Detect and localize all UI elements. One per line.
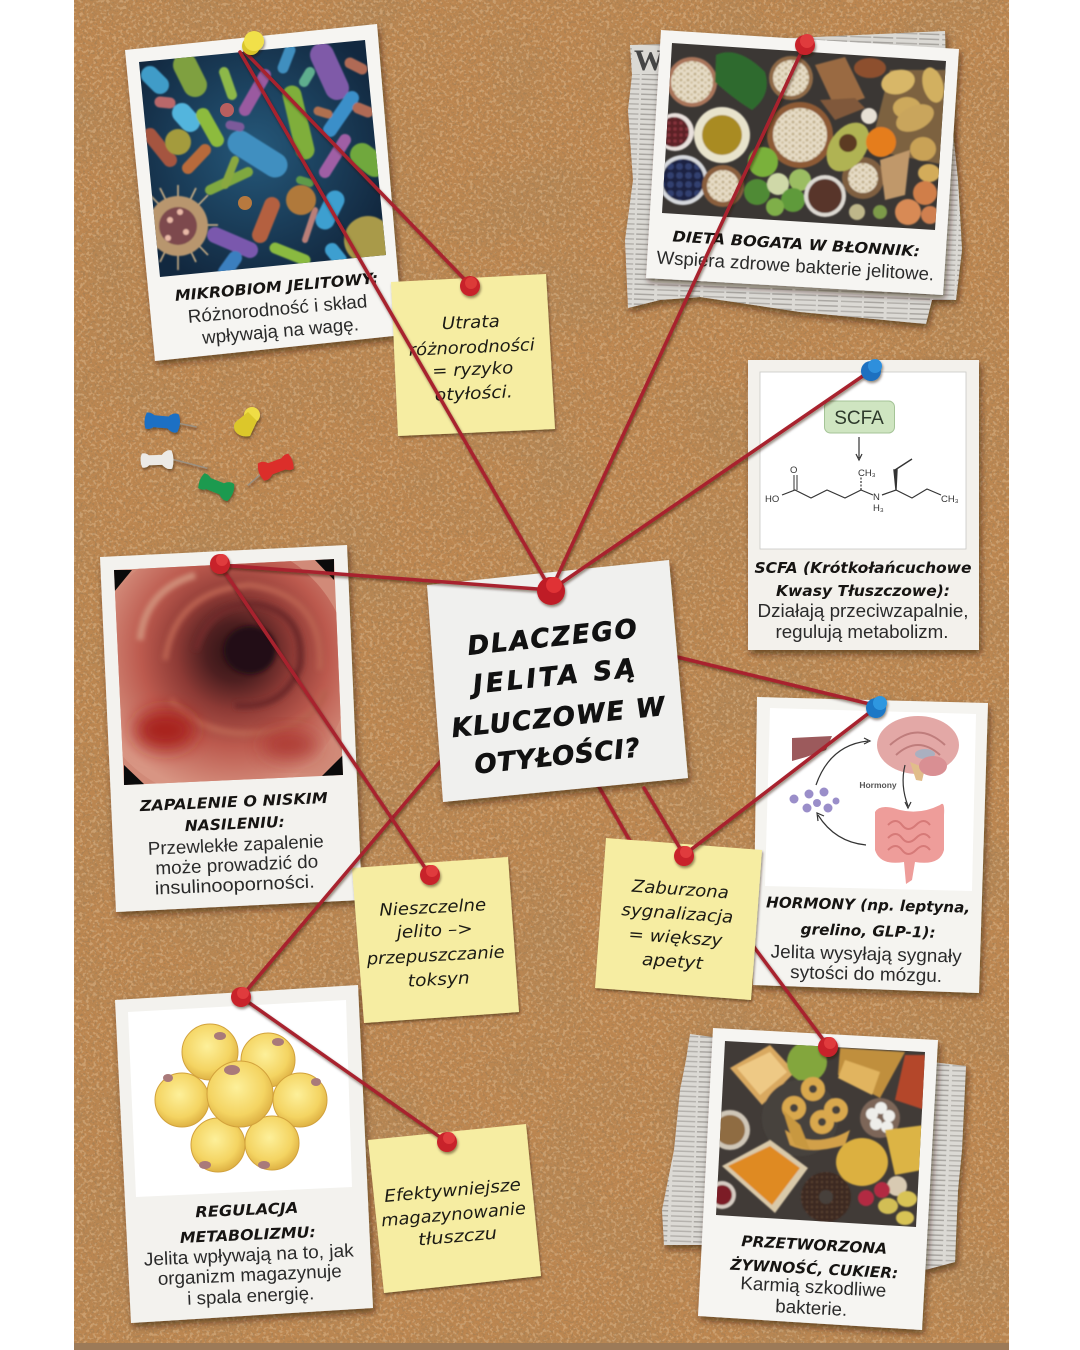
caption: SCFA: regulują metabolizm. — [776, 621, 948, 642]
chart: SCFA molecule diagram: N — [873, 492, 880, 503]
caption: fibre diet: Wspiera zdrowe bakterie jelitowe. — [656, 247, 935, 284]
diagram: gut-brain hormone loop: Hormony — [859, 780, 897, 790]
sticky note: diversity loss: = ryzyko — [432, 358, 514, 382]
caption: microbiome: MIKROBIOM JELITOWY: — [174, 269, 379, 305]
chart: SCFA molecule diagram: H₃ — [873, 503, 884, 514]
newspaper behind processed food card — [662, 1034, 966, 1270]
caption: SCFA — [754, 559, 972, 642]
title: OTYŁOŚCI? — [473, 731, 641, 781]
sticky note: fat storage — [368, 1124, 541, 1293]
icon: centre red pin — [537, 577, 565, 605]
icon: blue pin hormones — [866, 696, 887, 718]
sticky note: diversity loss: otyłości. — [434, 382, 513, 406]
icon: loose red pin — [242, 452, 296, 487]
sticky note: disrupted signalling: = większy — [628, 925, 724, 951]
caption: microbiome: wpływają na wagę. — [200, 313, 360, 348]
caption: processed food: ŻYWNOŚĆ, CUKIER: — [729, 1255, 899, 1282]
icon: red pin processed — [818, 1037, 838, 1057]
caption: inflammation: może prowadzić do — [155, 850, 319, 879]
newspaper behind diet card — [625, 31, 962, 324]
caption: SCFA: Działają przeciwzapalnie, — [758, 600, 968, 621]
caption: processed food: Karmią szkodliwe — [740, 1272, 887, 1301]
sticky note: disrupted signalling: Zaburzona — [630, 877, 729, 903]
caption: metabolism: REGULACJA — [195, 1199, 299, 1221]
caption: fibre diet — [656, 227, 935, 284]
caption: processed food — [729, 1232, 899, 1320]
sticky note: fat storage: Efektywniejsze — [383, 1175, 522, 1207]
panel: metabolism card — [115, 985, 373, 1323]
sticky note: leaky gut: jelito –> — [394, 919, 473, 943]
caption: processed food: PRZETWORZONA — [741, 1232, 888, 1258]
caption: hormones: sytości do mózgu. — [790, 961, 942, 986]
icon: yellow pin — [242, 31, 264, 55]
caption: hormones: HORMONY (np. leptyna, — [766, 893, 970, 917]
icon: loose blue pin — [144, 411, 198, 434]
chart: SCFA molecule diagram: CH₃ — [858, 468, 876, 479]
icon: red pin signalling — [674, 846, 694, 866]
sticky note: leaky gut: przepuszczanie — [365, 942, 505, 970]
chart: SCFA molecule diagram: SCFA — [834, 408, 884, 429]
caption: hormones — [766, 893, 970, 986]
caption: metabolism: i spala energię. — [187, 1282, 315, 1309]
red strings connecting pins — [220, 42, 878, 1142]
sticky note: diversity loss: różnorodności — [408, 335, 535, 361]
panel: SCFA card — [748, 360, 979, 650]
icon: red pin diet — [795, 34, 815, 55]
icon: red pin metabolism — [231, 987, 251, 1007]
panel: hormones card — [753, 697, 988, 993]
caption: metabolism: organizm magazynuje — [157, 1260, 342, 1289]
panel: fibre diet card — [646, 30, 959, 295]
sticky note: leaky gut: Nieszczelne — [379, 895, 487, 921]
chart: SCFA molecule diagram: HO — [765, 494, 779, 505]
photo: bacteria — [139, 40, 386, 277]
title: DLACZEGO — [466, 614, 638, 662]
caption: hormones: Jelita wysyłają sygnały — [770, 941, 963, 967]
sticky note: diversity loss — [391, 274, 555, 436]
caption: processed food: bakterie. — [775, 1295, 848, 1320]
caption: metabolism — [143, 1199, 355, 1309]
caption: inflammation: Przewlekłe zapalenie — [147, 830, 324, 859]
sticky note: fat storage: tłuszczu — [417, 1224, 498, 1250]
caption: microbiome — [174, 269, 379, 348]
newspaper behind diet card: W — [634, 44, 664, 77]
icon: blue pin SCFA — [861, 359, 882, 381]
sticky note: disrupted signalling: apetyt — [641, 950, 705, 974]
icon: red pin storage — [437, 1132, 457, 1152]
chart: SCFA molecule diagram: CH₃ — [941, 494, 959, 505]
illustration: fat cells — [128, 1000, 352, 1197]
title: KLUCZOWE W — [450, 692, 667, 744]
caption: metabolism: METABOLIZMU: — [179, 1223, 316, 1247]
icon: red pin sticky one — [460, 276, 480, 296]
diagram: gut-brain hormone loop — [765, 708, 976, 891]
panel: microbiome card — [125, 24, 403, 361]
caption: microbiome: Różnorodność i skład — [187, 290, 368, 327]
panel: inflammation card — [90, 540, 362, 912]
red strings behind notes — [241, 654, 878, 1046]
sticky note: fat storage: magazynowanie — [380, 1199, 527, 1231]
panel: processed food card — [698, 1028, 938, 1330]
caption: SCFA: SCFA (Krótkołańcuchowe — [754, 559, 972, 577]
photo: inflamed intestine — [114, 559, 343, 785]
chart: SCFA molecule diagram: O — [790, 465, 797, 476]
title: JELITA SĄ — [467, 654, 637, 701]
caption: inflammation: NASILENIU: — [184, 813, 285, 835]
caption: inflammation: insulinooporności. — [154, 871, 315, 898]
loose push pins — [140, 407, 296, 502]
title — [450, 614, 667, 781]
caption: inflammation — [138, 789, 328, 898]
photo: processed food — [716, 1041, 925, 1227]
caption: SCFA: Kwasy Tłuszczowe): — [776, 582, 950, 600]
sticky note: disrupted signalling — [595, 838, 762, 1000]
photo: healthy foods — [662, 43, 946, 230]
icon: red pin inflammation — [210, 554, 230, 574]
icon: red pin leaky — [420, 865, 440, 885]
icon: loose green pin — [196, 471, 236, 502]
chart: SCFA molecule diagram — [760, 372, 966, 549]
icon: loose white pin — [140, 449, 207, 471]
sticky note: leaky gut: toksyn — [407, 968, 470, 992]
sticky note: disrupted signalling: sygnalizacja — [621, 900, 734, 928]
caption: hormones: grelino, GLP-1): — [800, 920, 936, 942]
caption: metabolism: Jelita wpływają na to, jak — [143, 1239, 355, 1270]
caption: inflammation: ZAPALENIE O NISKIM — [138, 789, 328, 815]
sticky note: leaky gut — [352, 857, 519, 1023]
title note — [427, 560, 688, 802]
caption: fibre diet: DIETA BOGATA W BŁONNIK: — [672, 227, 921, 261]
icon: loose yellow pin — [234, 407, 260, 436]
map pins — [210, 31, 887, 1152]
sticky note: diversity loss: Utrata — [441, 312, 500, 334]
